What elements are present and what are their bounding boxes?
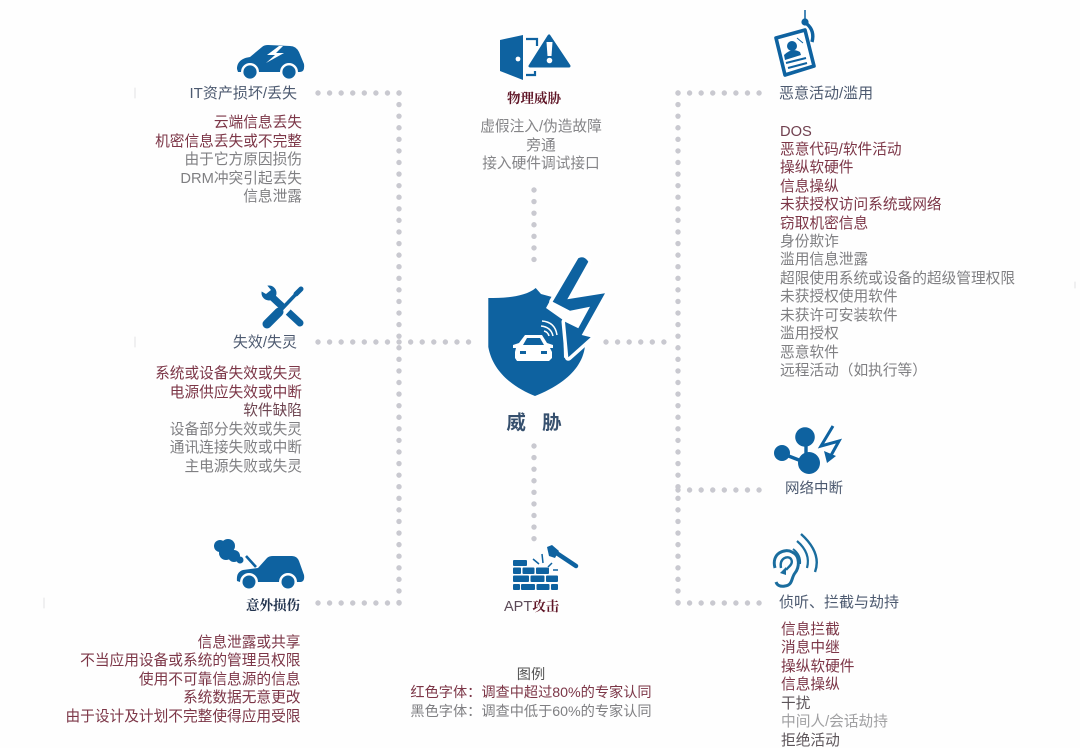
panel: failure or malfunction bbox=[155, 286, 304, 474]
legend: 黑色字体：调查中低于60%的专家认同 bbox=[410, 704, 652, 720]
heading: accidental damage: 意外损伤 bbox=[246, 598, 300, 613]
list: IT asset threats: 机密信息丢失或不完整 bbox=[155, 134, 302, 150]
list: malicious activity threats: 身份欺诈 bbox=[780, 234, 839, 250]
list: malicious activity threats: 操纵软硬件 bbox=[780, 160, 853, 176]
panel: accidental damage bbox=[65, 539, 304, 724]
icon: network nodes and lightning bbox=[774, 425, 842, 474]
list: failure threats: 软件缺陷 bbox=[243, 403, 302, 419]
list: malicious activity threats: 信息操纵 bbox=[780, 179, 839, 195]
list: eavesdropping threats: 操纵软硬件 bbox=[781, 658, 854, 674]
icon: damaged car bbox=[237, 45, 304, 79]
list: failure threats: 系统或设备失效或失灵 bbox=[155, 366, 302, 382]
list: eavesdropping threats: 消息中继 bbox=[781, 640, 840, 656]
icon: brick wall and hammer bbox=[513, 545, 578, 590]
list: malicious activity threats: DOS bbox=[780, 124, 812, 140]
heading: physical threat: 物理威胁 bbox=[507, 91, 561, 106]
list: malicious activity threats: 窃取机密信息 bbox=[780, 216, 868, 232]
heading: threat: 威 胁 bbox=[506, 412, 562, 434]
list: accidental damage threats: 系统数据无意更改 bbox=[183, 690, 300, 706]
list: malicious activity threats: 未获许可安装软件 bbox=[780, 308, 898, 324]
list: physical threats: 接入硬件调试接口 bbox=[482, 156, 600, 172]
heading: eavesdropping: 侦听、拦截与劫持 bbox=[779, 594, 899, 611]
list: failure threats: 电源供应失效或中断 bbox=[170, 384, 302, 400]
list: malicious activity threats: 滥用授权 bbox=[780, 326, 839, 342]
heading: IT asset damage: IT资产损坏/丢失 bbox=[190, 85, 297, 102]
heading: malicious activity: 恶意活动/滥用 bbox=[779, 85, 873, 102]
list: malicious activity threats: 超限使用系统或设备的超级管理权限 bbox=[780, 271, 1015, 287]
list: malicious activity threats: 远程活动（如执行等） bbox=[780, 363, 927, 379]
list: accidental damage threats: 信息泄露或共享 bbox=[198, 634, 300, 650]
list: eavesdropping threats: 信息拦截 bbox=[781, 622, 840, 638]
panel: physical threat bbox=[480, 34, 602, 172]
list: eavesdropping threats bbox=[781, 621, 888, 748]
icon: phishing hook on ID card bbox=[774, 10, 816, 77]
legend: 图例 bbox=[517, 666, 545, 682]
heading: failure: 失效/失灵 bbox=[233, 334, 297, 351]
list: failure threats bbox=[155, 365, 302, 474]
legend: 红色字体：调查中超过80%的专家认同 bbox=[410, 685, 652, 701]
legend bbox=[410, 666, 652, 720]
list: failure threats: 主电源失败或失灵 bbox=[184, 458, 302, 474]
list: eavesdropping threats: 干扰 bbox=[781, 696, 810, 712]
list: malicious activity threats: 恶意代码/软件活动 bbox=[780, 142, 902, 158]
list: malicious activity threats: 未获授权使用软件 bbox=[780, 289, 898, 305]
heading: network outage: 网络中断 bbox=[785, 481, 843, 497]
panel: IT asset damage or loss bbox=[155, 45, 304, 205]
list: IT asset threats: 云端信息丢失 bbox=[214, 115, 302, 131]
icon: ear with sound waves bbox=[772, 533, 818, 588]
panel: APT attack bbox=[504, 545, 578, 614]
list: accidental damage threats bbox=[65, 634, 300, 724]
panel: network outage bbox=[774, 425, 843, 497]
list: failure threats: 通讯连接失败或中断 bbox=[170, 440, 302, 456]
panel: malicious activity or abuse bbox=[774, 10, 1015, 379]
icon: wrench and screwdriver bbox=[262, 286, 304, 328]
list: malicious activity threats bbox=[780, 124, 1015, 379]
list: accidental damage threats: 不当应用设备或系统的管理员权限 bbox=[80, 653, 300, 669]
list: IT asset threats bbox=[155, 114, 302, 205]
list: IT asset threats: 信息泄露 bbox=[243, 189, 302, 205]
icon: shield with car and lightning bbox=[488, 257, 605, 396]
list: accidental damage threats: 由于设计及计划不完整使得应用受限 bbox=[65, 708, 300, 724]
list: malicious activity threats: 未获授权访问系统或网络 bbox=[780, 197, 942, 213]
panel: central threat emblem bbox=[488, 257, 605, 434]
list: eavesdropping threats: 信息操纵 bbox=[781, 677, 840, 693]
list: malicious activity threats: 滥用信息泄露 bbox=[780, 252, 868, 268]
list: failure threats: 设备部分失效或失灵 bbox=[170, 422, 302, 438]
list: physical threats: 虚假注入/伪造故障 bbox=[480, 119, 602, 135]
list: IT asset threats: DRM冲突引起丢失 bbox=[180, 170, 302, 186]
list: IT asset threats: 由于它方原因损伤 bbox=[184, 152, 302, 168]
icon: door and warning triangle bbox=[500, 34, 570, 80]
panel: eavesdropping, interception and hijacking bbox=[772, 533, 899, 748]
list: physical threats: 旁通 bbox=[526, 138, 556, 154]
heading: APT attack: APT攻击 bbox=[504, 598, 559, 614]
list: accidental damage threats: 使用不可靠信息源的信息 bbox=[139, 672, 300, 688]
list: malicious activity threats: 恶意软件 bbox=[780, 345, 839, 361]
list: physical threats bbox=[480, 118, 602, 172]
list: eavesdropping threats: 中间人/会话劫持 bbox=[781, 714, 888, 730]
icon: smoking car bbox=[214, 539, 304, 588]
